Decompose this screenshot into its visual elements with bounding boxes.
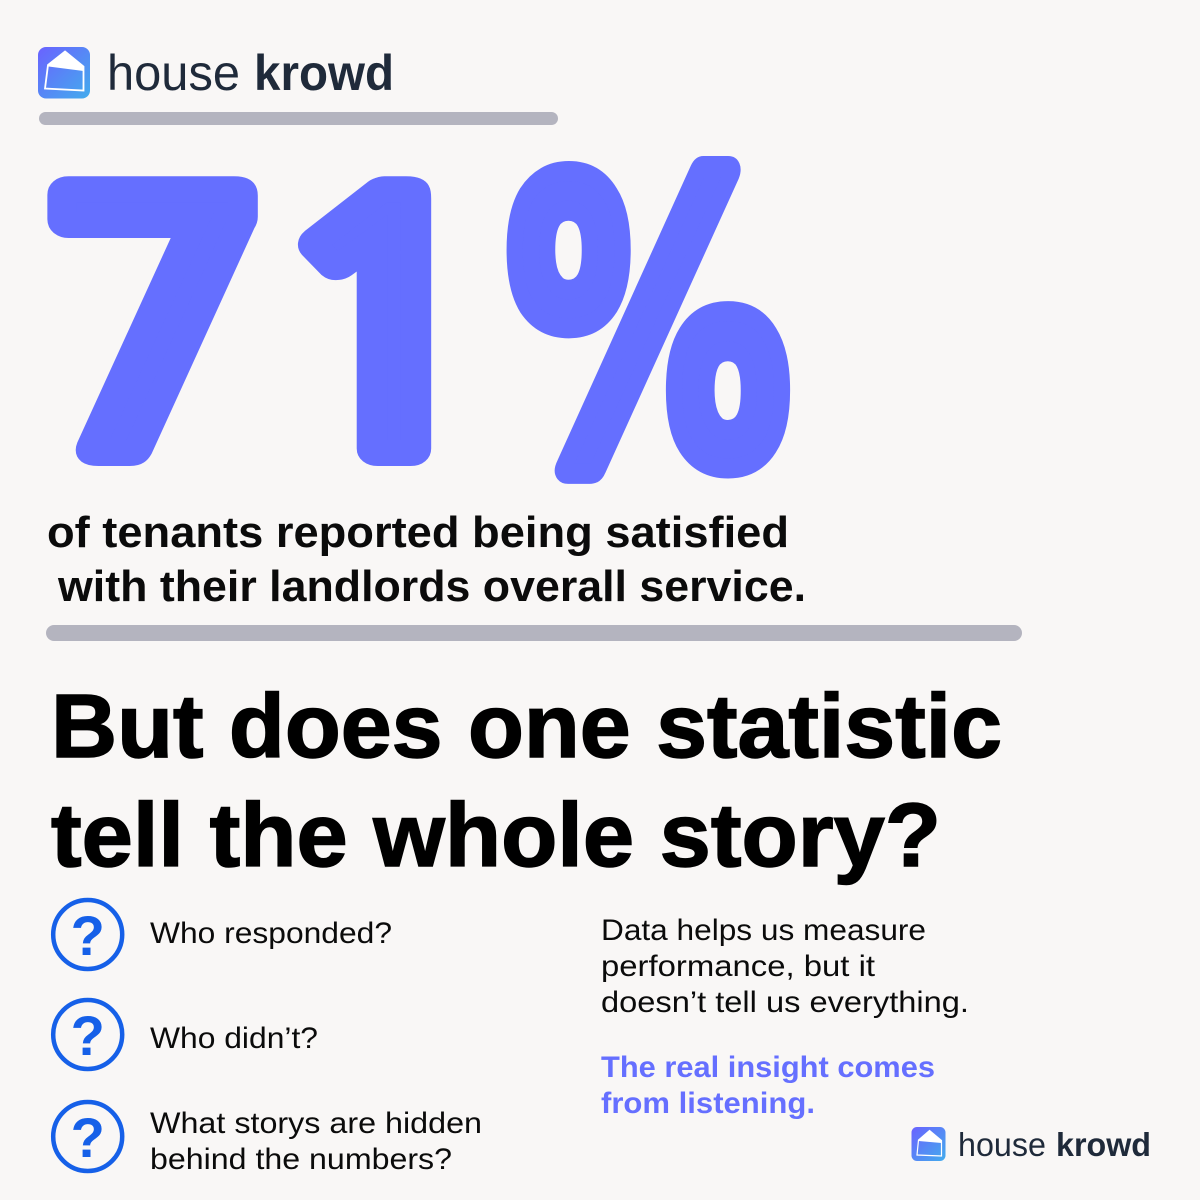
icon: small house logo bbox=[912, 1127, 946, 1161]
main question heading: But does one statistic bbox=[51, 677, 1002, 777]
middle divider bar bbox=[46, 625, 1022, 641]
body text: data helps: doesn’t tell us everything. bbox=[601, 986, 969, 1019]
big statistic 71%: 7 bbox=[37, 160, 272, 504]
big statistic 71% bbox=[37, 146, 817, 524]
statistic description: of tenants reported being satisfied bbox=[47, 508, 789, 557]
main question heading bbox=[51, 677, 1002, 886]
question text 3 bbox=[150, 1107, 482, 1176]
highlight text: real insight bbox=[601, 1051, 935, 1120]
small logo wordmark: house bbox=[958, 1126, 1046, 1163]
icon: question 1: ? bbox=[71, 904, 105, 967]
icon: question 2: ? bbox=[71, 1004, 105, 1067]
question text 1: Who responded? bbox=[150, 917, 392, 950]
logo wordmark: house bbox=[107, 45, 240, 101]
icon: question 3 bbox=[53, 1102, 122, 1171]
icon: question 1 bbox=[53, 900, 122, 969]
body text: data helps: Data helps us measure bbox=[601, 914, 926, 947]
logo: bottom bbox=[912, 1126, 1151, 1163]
icon: house logo bbox=[38, 47, 90, 98]
body text: data helps bbox=[601, 914, 969, 1019]
icon: question 2 bbox=[53, 1000, 122, 1069]
question text 2: Who didn’t? bbox=[150, 1022, 318, 1055]
question text 3: behind the numbers? bbox=[150, 1143, 452, 1176]
big statistic 71%: 1 bbox=[261, 160, 509, 504]
highlight text: real insight: from listening. bbox=[601, 1087, 815, 1120]
big statistic 71%: % bbox=[480, 146, 817, 524]
body text: data helps: performance, but it bbox=[601, 950, 876, 983]
top divider bar bbox=[39, 112, 558, 125]
small logo wordmark: krowd bbox=[1056, 1126, 1151, 1163]
highlight text: real insight: The real insight comes bbox=[601, 1051, 935, 1084]
main question heading: tell the whole story? bbox=[51, 786, 941, 886]
statistic description: with their landlords overall service. bbox=[57, 562, 806, 611]
question text 3: What storys are hidden bbox=[150, 1107, 482, 1140]
logo: top bbox=[38, 45, 394, 101]
statistic description bbox=[47, 508, 806, 611]
logo wordmark: krowd bbox=[254, 45, 394, 101]
icon: question 3: ? bbox=[71, 1106, 105, 1169]
